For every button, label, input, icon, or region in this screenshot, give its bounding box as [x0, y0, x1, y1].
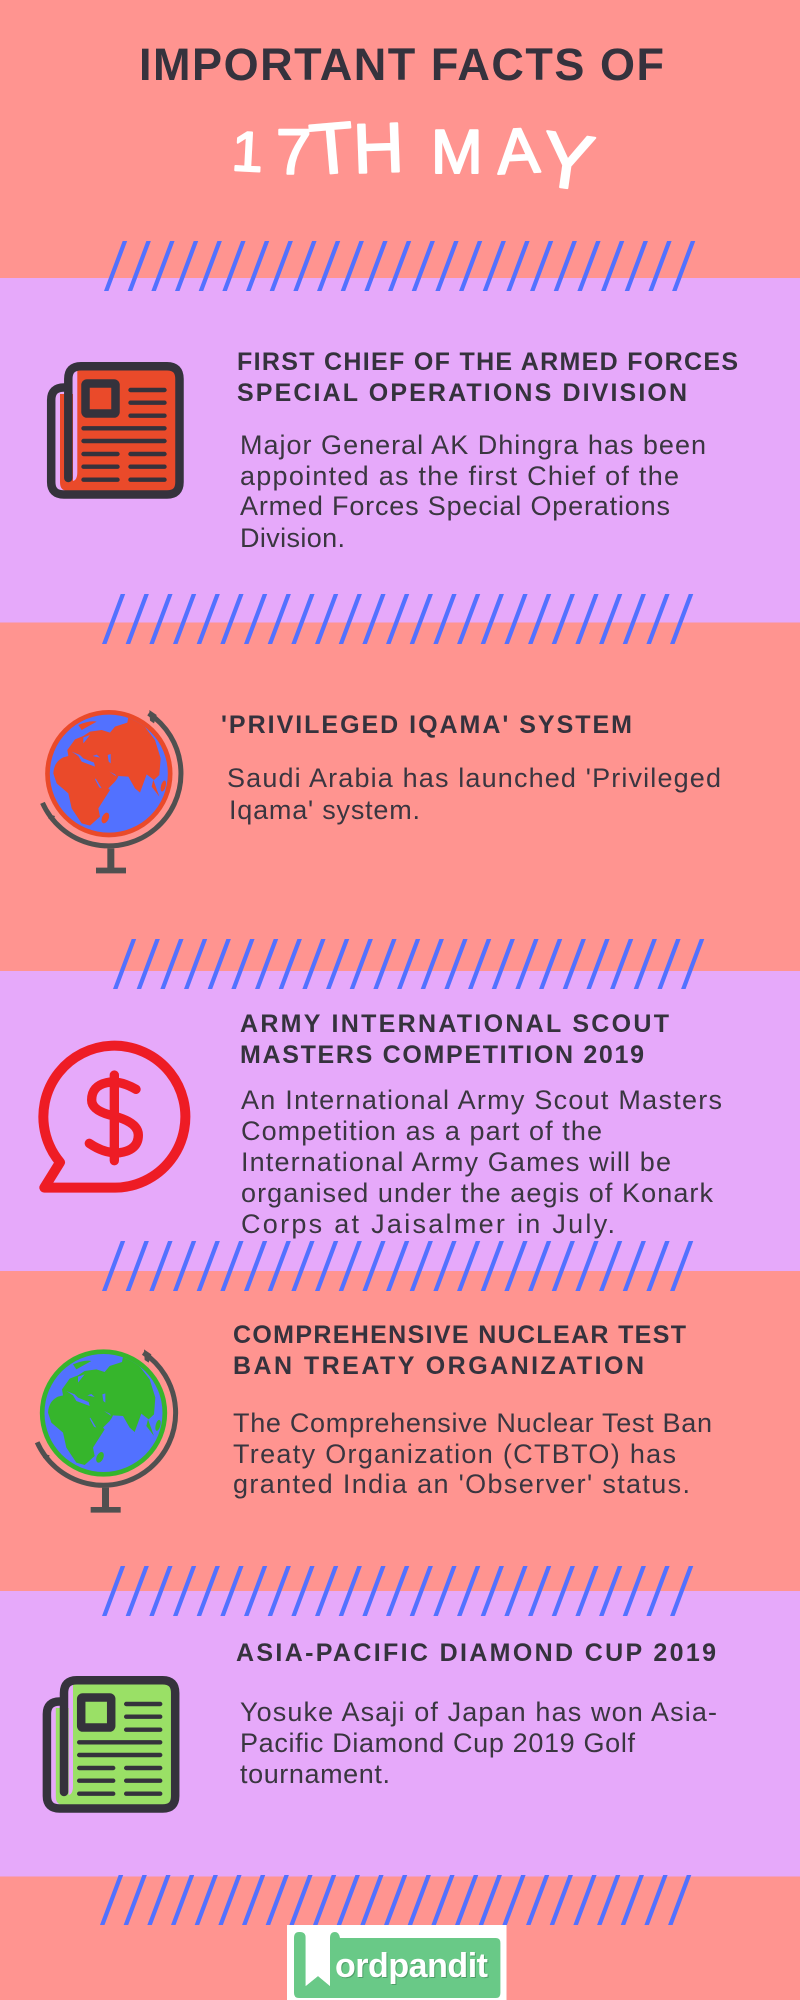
text block: Major General AK Dhingra has been — [240, 430, 706, 460]
heading: FIRST CHIEF OF THE ARMED FORCES — [237, 348, 738, 376]
heading — [237, 348, 738, 407]
title: date, 17th May: 7 — [276, 116, 312, 188]
icon: green newspaper — [47, 1680, 175, 1808]
title: date, 17th May: A — [495, 114, 542, 188]
icon: red globe — [42, 710, 181, 873]
logo: wordpandit — [287, 1925, 506, 2000]
icon: dollar speech bubble — [43, 1046, 185, 1188]
text block: Division. — [240, 523, 345, 553]
text block: tournament. — [240, 1759, 390, 1789]
panel: privileged iqama — [42, 710, 721, 873]
text block: International Army Games will be — [241, 1147, 671, 1177]
heading: ASIA-PACIFIC DIAMOND CUP 2019 — [236, 1639, 716, 1667]
text block: Saudi Arabia has launched 'Privileged — [227, 763, 721, 793]
heading: COMPREHENSIVE NUCLEAR TEST — [233, 1321, 686, 1349]
panel: asia-pacific diamond cup — [0, 1591, 800, 1876]
heading: MASTERS COMPETITION 2019 — [240, 1041, 644, 1069]
heading: SPECIAL OPERATIONS DIVISION — [237, 379, 687, 407]
title: date, 17th May: M — [431, 118, 483, 187]
text block: Iqama' system. — [229, 795, 420, 825]
text block: Treaty Organization (CTBTO) has — [233, 1439, 676, 1469]
text block: Armed Forces Special Operations — [240, 491, 670, 521]
text block: Competition as a part of the — [241, 1116, 602, 1146]
text block: Pacific Diamond Cup 2019 Golf — [240, 1728, 635, 1758]
text block: appointed as the first Chief of the — [240, 461, 679, 491]
heading: 'PRIVILEGED IQAMA' SYSTEM — [221, 711, 632, 739]
text block: The Comprehensive Nuclear Test Ban — [233, 1408, 712, 1438]
header: title block — [139, 39, 664, 208]
title: date, 17th May: 1 — [230, 119, 265, 184]
text block: Yosuke Asaji of Japan has won Asia- — [240, 1697, 717, 1727]
text block — [240, 430, 706, 553]
text block: granted India an 'Observer' status. — [233, 1469, 690, 1499]
heading: BAN TREATY ORGANIZATION — [233, 1352, 644, 1380]
heading: ARMY INTERNATIONAL SCOUT — [240, 1010, 669, 1038]
text block: Corps at Jaisalmer in July. — [241, 1209, 615, 1239]
text block: An International Army Scout Masters — [241, 1085, 722, 1115]
heading — [233, 1321, 686, 1380]
text block — [240, 1697, 717, 1789]
title: date, 17th May: H — [352, 108, 405, 188]
text block: organised under the aegis of Konark — [241, 1178, 714, 1208]
title: date, 17th May: Y — [536, 114, 599, 208]
icon: orange newspaper — [51, 366, 180, 494]
panel: scout masters competition — [0, 971, 800, 1271]
text block — [227, 763, 721, 825]
text block — [233, 1408, 712, 1499]
panel: armed forces special operations — [0, 278, 800, 622]
heading — [240, 1010, 669, 1069]
panel: nuclear test ban treaty — [37, 1321, 712, 1513]
title: date, 17th May: T — [306, 107, 357, 191]
logo: wordpandit: ordpandit — [335, 1947, 488, 1985]
icon: green globe — [37, 1349, 176, 1513]
title: important facts of: IMPORTANT FACTS OF — [139, 39, 664, 90]
text block — [241, 1085, 722, 1239]
